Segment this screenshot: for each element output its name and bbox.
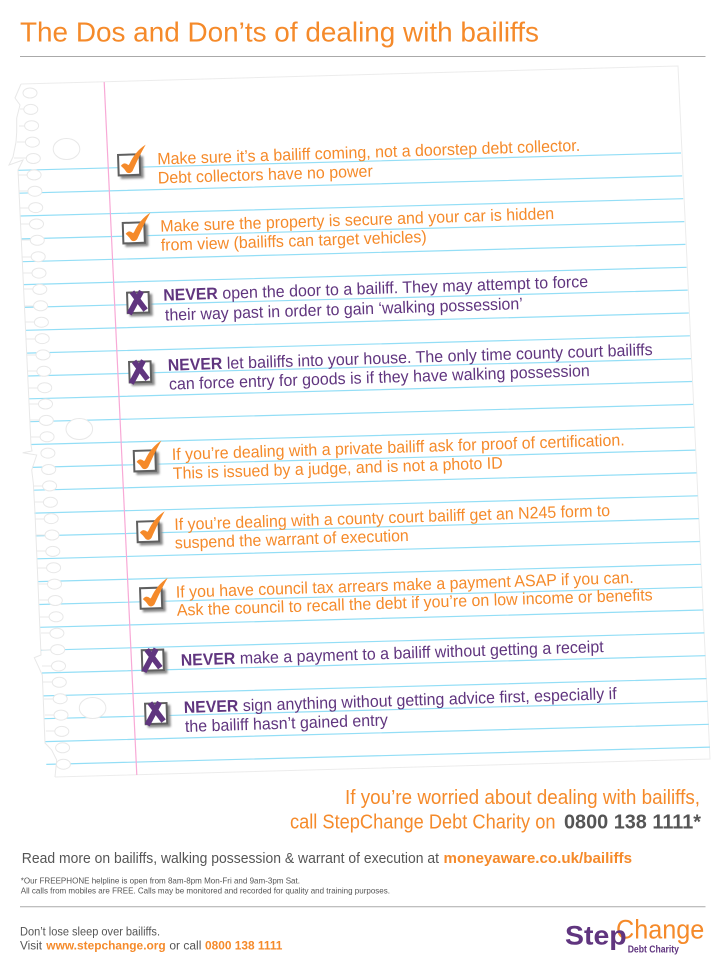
title: The Dos and Don’ts of dealing with bailiffs xyxy=(20,17,539,48)
icon: cross 4 xyxy=(129,360,155,386)
footer contact text: Don’t lose sleep over bailiffs. xyxy=(20,927,160,939)
item 2 text xyxy=(160,204,554,255)
footnote: All calls from mobiles are FREE. Calls may be monitored and recorded for quality and training purposes. xyxy=(21,886,390,896)
item 6 text: suspend the warrant of execution xyxy=(175,526,409,552)
callout: call StepChange: 0800 138 1111* xyxy=(564,810,701,833)
item 5 text: If you’re dealing with a private bailiff ask for proof of certification. xyxy=(172,430,625,464)
footer contact text xyxy=(20,927,283,953)
item 5 text xyxy=(172,430,625,483)
logo: StepChange Debt Charity: Change xyxy=(616,914,704,944)
icon: tick 7 xyxy=(140,578,169,612)
panel: notepaper xyxy=(9,66,710,777)
footnote xyxy=(21,876,390,896)
item 9 text: NEVER xyxy=(184,696,239,717)
callout: call StepChange xyxy=(290,787,701,833)
item 6 text xyxy=(174,501,610,552)
item 3 text: NEVER xyxy=(163,284,218,305)
icon: cross 9 xyxy=(145,702,171,728)
item 8 text: make a payment to a bailiff without getting a receipt xyxy=(239,637,604,668)
read more line: moneyaware.co.uk/bailiffs xyxy=(444,851,632,867)
item 7 text: Ask the council to recall the debt if you’re on low income or benefits xyxy=(177,585,653,620)
item 2 text: Make sure the property is secure and your car is hidden xyxy=(160,204,554,236)
item 1 text: Debt collectors have no power xyxy=(158,162,373,187)
item 7 text: If you have council tax arrears make a payment ASAP if you can. xyxy=(176,568,634,602)
logo: StepChange Debt Charity xyxy=(565,914,704,956)
item 3 text: their way past in order to gain ‘walking possession’ xyxy=(165,294,523,325)
logo: StepChange Debt Charity: Debt Charity xyxy=(628,944,679,956)
item 9 text: the bailiff hasn’t gained entry xyxy=(185,710,389,736)
item 7 text xyxy=(176,568,653,620)
icon: cross 8 xyxy=(142,648,167,674)
icon: cross 3 xyxy=(127,291,153,317)
item 1 text: Make sure it’s a bailiff coming, not a doorstep debt collector. xyxy=(157,136,580,168)
item 4 text xyxy=(168,340,653,394)
icon: tick 6 xyxy=(137,511,166,546)
item 3 text: open the door to a bailiff. They may attempt to force xyxy=(222,272,588,303)
item 4 text: NEVER xyxy=(168,354,223,375)
item 8 text: NEVER xyxy=(181,649,236,670)
item 2 text: from view (bailiffs can target vehicles) xyxy=(161,227,427,255)
item 5 text: This is issued by a judge, and is not a photo ID xyxy=(173,453,503,483)
item 4 text: let bailiffs into your house. The only time county court bailiffs xyxy=(226,340,653,373)
footer contact text: 0800 138 1111 xyxy=(205,941,283,953)
footnote: *Our FREEPHONE helpline is open from 8am-8pm Mon-Fri and 9am-3pm Sat. xyxy=(21,876,300,886)
footer contact text: Visit xyxy=(20,941,43,953)
icon: tick 2 xyxy=(122,213,151,247)
logo: StepChange Debt Charity: Step xyxy=(565,920,627,950)
item 4 text: can force entry for goods is if they have walking possession xyxy=(169,361,590,394)
item 3 text xyxy=(163,272,589,325)
icon: tick 5 xyxy=(133,441,162,475)
icon: tick 1 xyxy=(118,145,147,179)
item 6 text: If you’re dealing with a county court bailiff get an N245 form to xyxy=(174,501,610,534)
callout: call StepChange: If you’re worried about dealing with bailiffs, xyxy=(345,787,700,809)
footer contact text: www.stepchange.org xyxy=(45,941,166,953)
read more line: Read more on bailiffs, walking possession & warrant of execution at xyxy=(22,851,439,867)
callout: call StepChange: call StepChange Debt Charity on xyxy=(290,811,556,833)
item 9 text: sign anything without getting advice first, especially if xyxy=(242,684,617,715)
item 1 text xyxy=(157,136,580,187)
item 9 text xyxy=(184,684,618,736)
footer contact text: or call xyxy=(169,941,201,953)
